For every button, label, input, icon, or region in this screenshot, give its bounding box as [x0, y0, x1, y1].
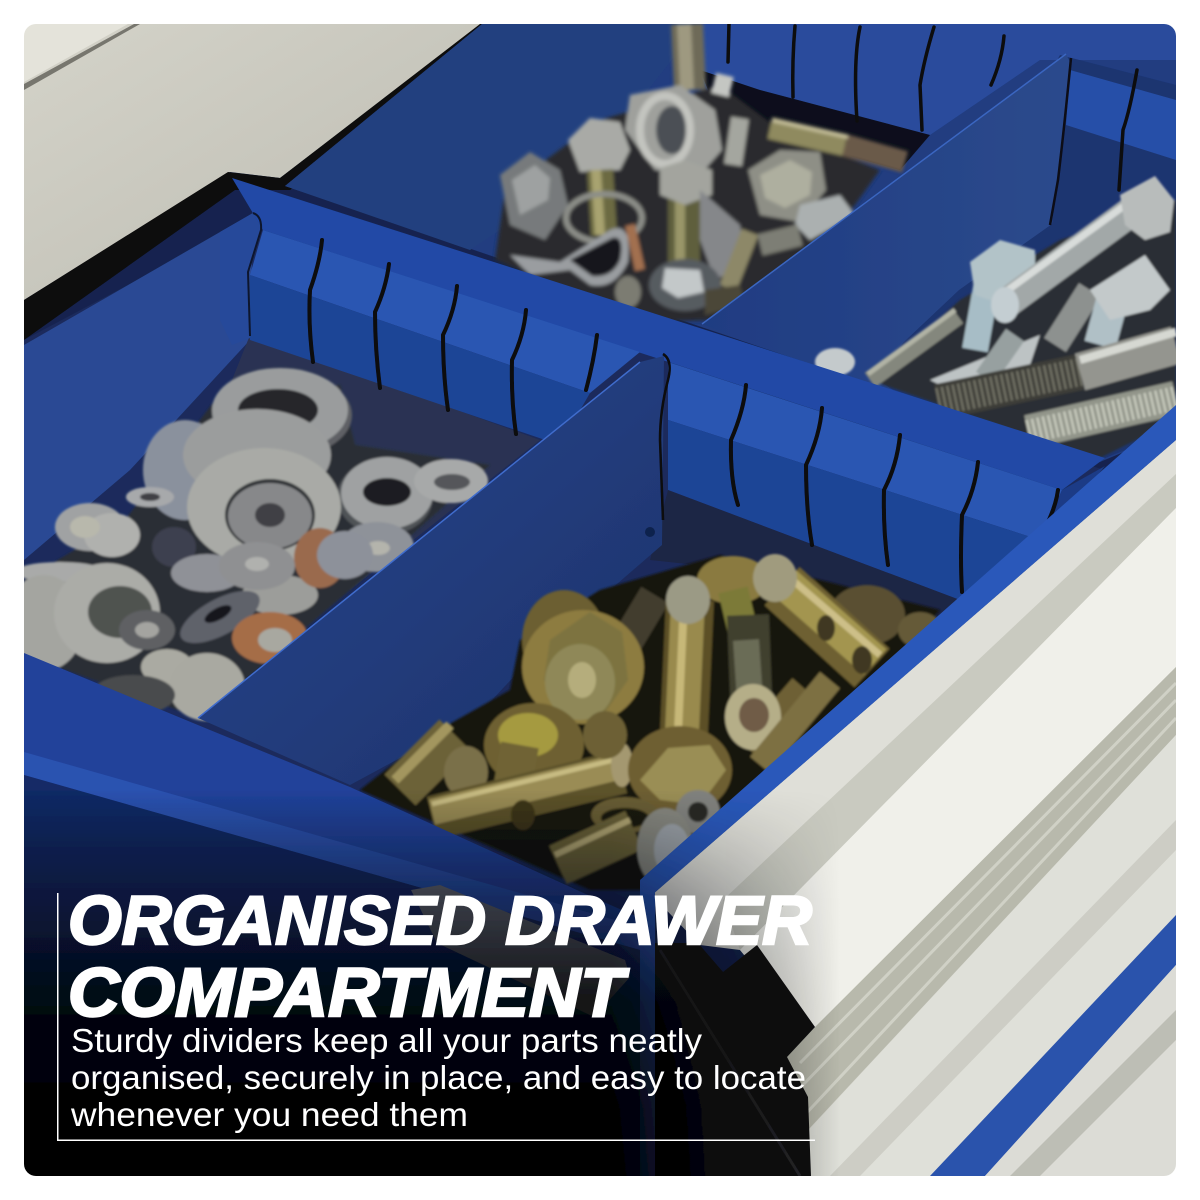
gold anchors pile	[360, 554, 942, 890]
description: organised, securely in place, and easy to locate	[71, 1059, 806, 1096]
title line 2: COMPARTMENT	[68, 954, 629, 1031]
description: whenever you need them	[70, 1096, 468, 1133]
black corner piece	[655, 943, 815, 1176]
front divider	[198, 354, 670, 785]
drawer blue rims	[640, 405, 1176, 1176]
rail slots back	[728, 24, 1137, 190]
nuts and bolts pile	[495, 24, 905, 322]
description	[70, 1022, 806, 1133]
back divider	[702, 54, 1071, 395]
cabinet top panel	[24, 24, 505, 340]
rail slots right	[731, 385, 1058, 592]
main cross rail	[220, 178, 1105, 490]
back compartment	[285, 24, 1176, 462]
front right rail	[650, 362, 1105, 625]
description: Sturdy dividers keep all your parts neatly	[71, 1022, 703, 1059]
drawer front wall	[24, 653, 655, 1176]
front compartment base	[24, 213, 1176, 920]
rail slots left	[309, 240, 597, 434]
long bolts right compartment	[815, 176, 1176, 458]
cabinet frame	[652, 440, 1176, 1176]
title: ORGANISED DRAWER	[68, 882, 812, 959]
dark bottom gradient	[24, 790, 832, 1176]
text block frame	[57, 893, 815, 1141]
washers	[4, 368, 490, 721]
